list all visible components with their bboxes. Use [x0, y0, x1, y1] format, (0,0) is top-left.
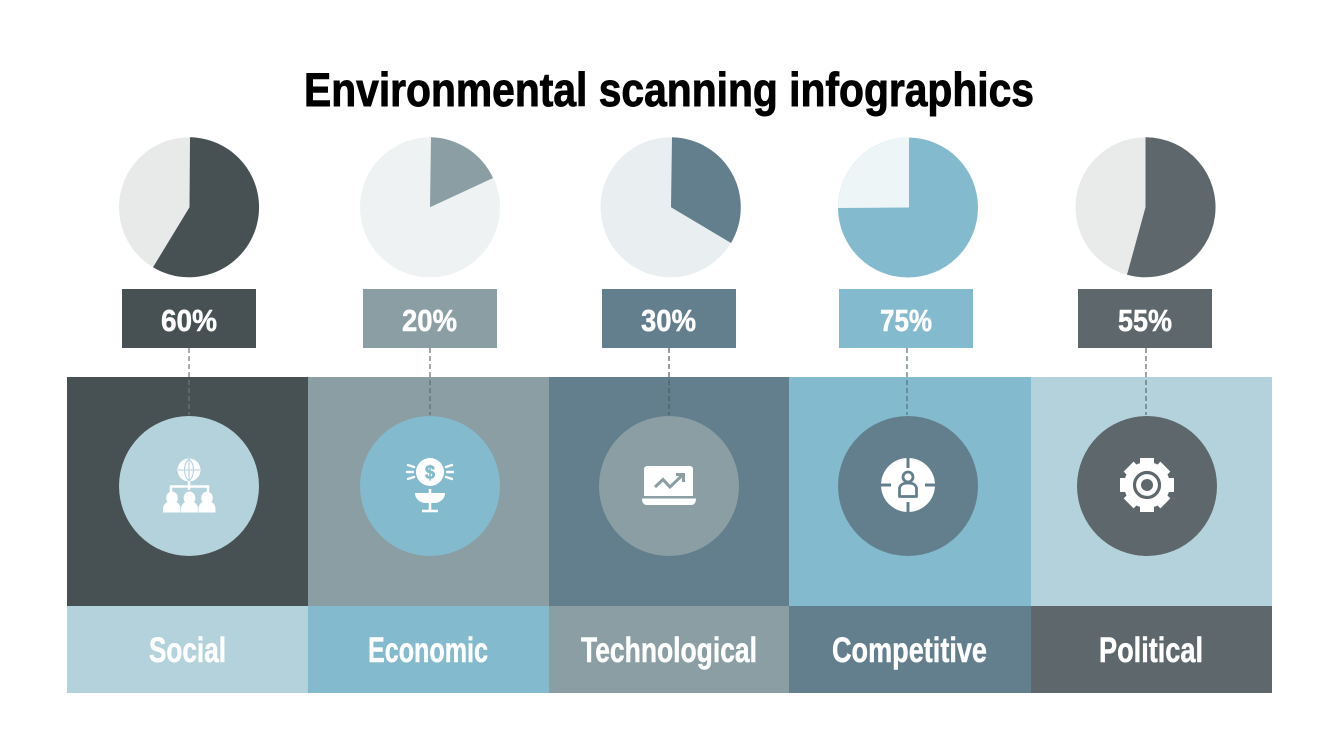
icon badge: gear [1077, 416, 1217, 556]
icon badge: money plant: $ [425, 462, 435, 482]
pie chart: technological 30% [600, 137, 741, 277]
panel: economic block [308, 377, 549, 606]
pie chart: economic 20% [360, 137, 500, 277]
icon badge: laptop chart [599, 416, 739, 556]
connector: competitive [906, 348, 908, 415]
value label: 30%: 30% [641, 303, 696, 338]
category label: Social: Social [149, 631, 226, 670]
category label: Technological [549, 606, 789, 693]
value label: 55% [1078, 289, 1212, 348]
category label: Competitive: Competitive [832, 631, 987, 670]
category label: Political: Political [1099, 631, 1203, 670]
panel: competitive block [789, 377, 1031, 606]
value label: 60% [122, 289, 256, 348]
value label: 75% [839, 289, 973, 348]
connector: political [1145, 348, 1147, 415]
connector: economic [429, 348, 431, 415]
value label: 60%: 60% [161, 303, 217, 338]
pie chart: political 55% [1076, 137, 1216, 277]
value label: 30% [602, 289, 736, 348]
connector: technological [668, 348, 670, 415]
category label: Economic [308, 606, 549, 693]
icon badge: social network [119, 416, 259, 556]
value label: 75%: 75% [880, 303, 932, 338]
value label: 20%: 20% [402, 303, 457, 338]
icon badge: money plant [360, 416, 500, 556]
pie chart: competitive 75% [838, 137, 978, 278]
panel: political block [1031, 377, 1272, 606]
value label: 55%: 55% [1118, 303, 1172, 338]
category label: Technological: Technological [581, 631, 757, 670]
category label: Social [67, 606, 308, 693]
icon badge: target person [838, 416, 978, 556]
value label: 20% [363, 289, 497, 348]
panel: social block [67, 377, 308, 606]
panel: technological block [549, 377, 789, 606]
category label: Competitive [789, 606, 1031, 693]
category label: Political [1031, 606, 1272, 693]
connector: social [188, 348, 190, 415]
category label: Economic: Economic [368, 631, 488, 670]
title: Environmental scanning infographics [304, 63, 1034, 116]
pie chart: social 60% [119, 137, 259, 277]
